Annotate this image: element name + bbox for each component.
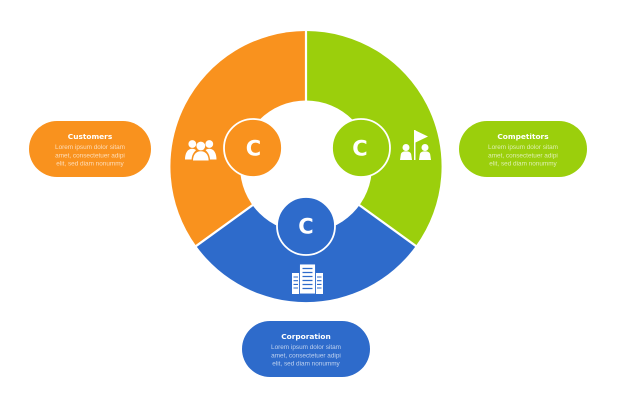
callout: customers: Customers: [68, 132, 113, 141]
icon: people group: [185, 140, 216, 160]
node: customers: [224, 119, 282, 177]
center hole: [240, 100, 372, 232]
callout: competitors: Competitors: [497, 132, 549, 141]
callout: corporation: Lorem ipsum dolor sitam: [271, 344, 341, 351]
node: corporation: [277, 197, 335, 255]
callout: corporation: amet, consectetuer adipi: [271, 352, 341, 359]
callout: corporation: Corporation: [281, 332, 331, 341]
callout: competitors: amet, consectetuer adipi: [488, 152, 558, 159]
callout: customers: amet, consectetuer adipi: [55, 152, 125, 159]
segment gaps: [195, 29, 417, 247]
callout: competitors: [459, 121, 587, 177]
callout: competitors: Lorem ipsum dolor sitam: [488, 144, 558, 151]
callout: customers: [29, 121, 151, 177]
node: competitors: C: [352, 136, 368, 160]
ring diagram: [170, 29, 442, 302]
segment: corporation: [196, 166, 416, 302]
node: customers: C: [246, 136, 261, 160]
callout: customers: Lorem ipsum dolor sitam: [55, 144, 125, 151]
node: corporation: C: [298, 214, 314, 238]
node: competitors: [332, 119, 390, 177]
segment: competitors: [306, 31, 442, 246]
callout: corporation: elit, sed diam nonummy: [272, 361, 341, 368]
callout: customers: elit, sed diam nonummy: [56, 161, 125, 168]
icon: people with flag: [400, 130, 431, 160]
segment: customers: [170, 31, 306, 246]
callout: corporation: [242, 321, 370, 377]
callout: competitors: elit, sed diam nonummy: [489, 161, 558, 168]
icon: office building: [292, 264, 323, 294]
